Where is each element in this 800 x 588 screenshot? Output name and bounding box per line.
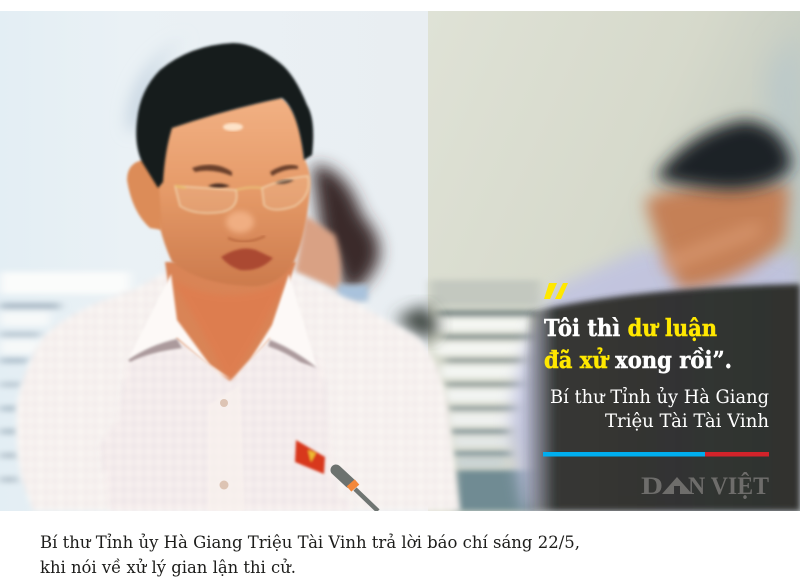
- person behind: blue collar: [338, 285, 368, 301]
- neck shadow: [224, 370, 240, 380]
- person behind speaker: [295, 165, 380, 301]
- speaker: [17, 43, 460, 511]
- divider bar blue: [543, 452, 705, 456]
- collar left inner shadow: [128, 339, 182, 362]
- logo remaining letters: N VIỆT: [688, 472, 769, 500]
- attribution line 1: Bí thư Tỉnh ủy Hà Giang: [550, 386, 769, 408]
- dark object behind shoulder: [395, 305, 440, 340]
- placket: [208, 385, 245, 511]
- quote block: [543, 283, 769, 500]
- blurred blinds right: [430, 280, 540, 511]
- colleague hair: [655, 120, 792, 190]
- eyebrows: [192, 165, 298, 176]
- collar left: [127, 274, 232, 380]
- blurred blinds left: [0, 272, 130, 482]
- glasses: [175, 176, 309, 213]
- caption line 1: Bí thư Tỉnh ủy Hà Giang Triệu Tài Vinh trả lời báo chí sáng 22/5,: [40, 533, 580, 553]
- microphone: [336, 470, 378, 511]
- forehead highlight: [223, 123, 243, 131]
- blurred colleague right: [510, 30, 800, 511]
- neck: [165, 262, 296, 381]
- icon: yellow quote marks: [544, 283, 568, 299]
- colleague shirt: [510, 250, 800, 511]
- divider bar red: [705, 452, 769, 456]
- caption: [40, 533, 580, 578]
- collar right inner shadow: [268, 340, 317, 368]
- colleague face streak: [665, 228, 760, 265]
- shirt front panel with checks: [102, 354, 324, 501]
- colleague face: [645, 184, 790, 290]
- collar right: [246, 274, 315, 364]
- caption line 2: khi nói về xử lý gian lận thi cử.: [40, 558, 296, 578]
- face: [153, 97, 310, 286]
- logo letter D: D: [641, 473, 663, 500]
- shadow halo behind head: [123, 52, 169, 132]
- person behind: hair: [312, 165, 380, 292]
- headline line 2: đã xử xong rồi”.: [544, 347, 732, 374]
- dark quote panel: [522, 284, 800, 511]
- flag pin: [295, 440, 325, 474]
- background wall right: [428, 11, 800, 511]
- mouth: [221, 249, 273, 270]
- colleague right edge: [772, 60, 795, 130]
- person behind: face: [295, 215, 341, 290]
- background wall left: [0, 11, 430, 511]
- nose shadow: [228, 236, 265, 242]
- cheek shade: [226, 211, 254, 233]
- shirt body: [17, 270, 460, 511]
- headline line 1: Tôi thì dư luận: [544, 315, 717, 342]
- shirt buttons: [220, 399, 228, 490]
- logo: Dân Việt: [641, 472, 769, 500]
- attribution line 2: Triệu Tài Tài Vinh: [605, 410, 769, 432]
- ear: [127, 160, 162, 230]
- eyes: [208, 179, 294, 188]
- logo house icon: [662, 477, 692, 494]
- hair: [136, 43, 313, 188]
